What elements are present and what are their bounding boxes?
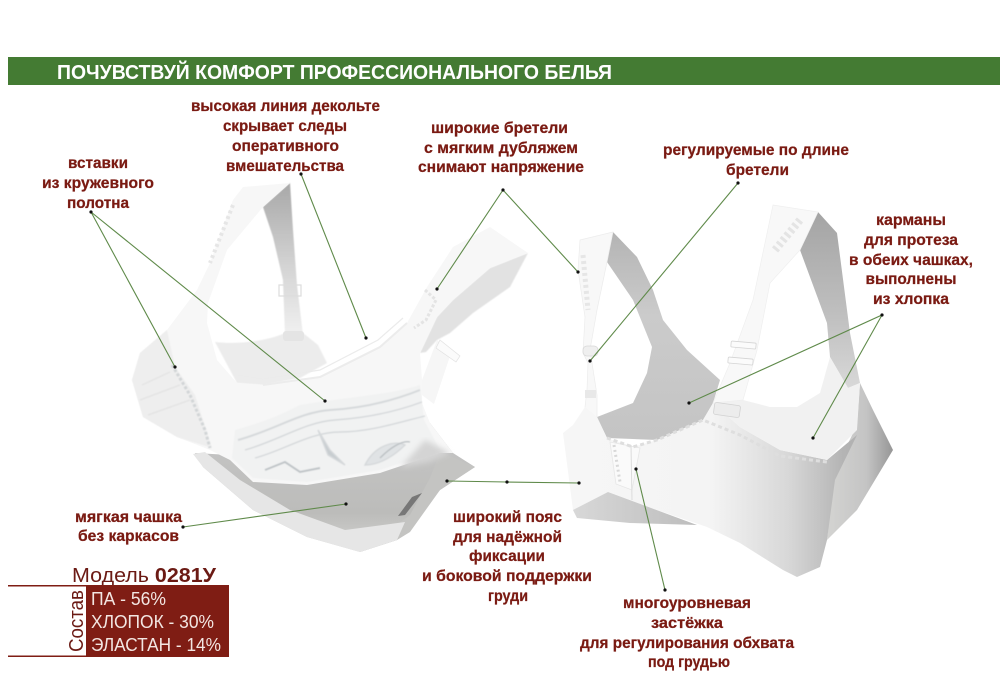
label: high neckline: оперативного (232, 138, 339, 155)
label: wide band: широкий пояс (453, 509, 562, 526)
composition heading: Состав (66, 590, 88, 652)
model and composition block (8, 565, 229, 657)
label: high neckline (191, 98, 380, 175)
label: multi-level closure: многоуровневая (623, 595, 751, 612)
label: wide band: фиксации (469, 548, 545, 565)
grey inner cup and band (195, 423, 475, 552)
lace panel (232, 385, 440, 482)
right strap lining (800, 212, 860, 388)
label: multi-level closure: застёжка (651, 615, 723, 632)
label: soft cup: мягкая чашка (75, 509, 182, 526)
illustration: bra back view (563, 205, 893, 577)
left strap lining (597, 232, 720, 440)
label: wide straps (418, 120, 584, 176)
leader lines (89, 172, 884, 592)
side lace (132, 330, 212, 448)
illustration: bra front view (132, 183, 528, 552)
banner title: ПОЧУВСТВУЙ КОМФОРТ ПРОФЕССИОНАЛЬНОГО БЕЛЬЯ (57, 60, 612, 84)
strap underside and slider (420, 253, 528, 404)
label: wide band: и боковой поддержки (422, 568, 592, 585)
label: prosthesis pockets: карманы (876, 212, 946, 229)
label: soft cup: без каркасов (78, 528, 179, 545)
label: high neckline: вмешательства (226, 158, 344, 175)
label: prosthesis pockets: для протеза (864, 232, 958, 249)
right strap (713, 205, 818, 418)
label: adjustable straps (663, 142, 849, 179)
label: wide straps: широкие бретели (431, 120, 568, 137)
back strap and inner back (215, 183, 327, 385)
composition list: ХЛОПОК - 30% (91, 612, 214, 632)
belt underside (573, 492, 697, 525)
label: lace inserts: из кружевного (42, 175, 154, 192)
label: wide band (422, 509, 592, 605)
label: adjustable straps: регулируемые по длине (663, 142, 849, 159)
label: wide band: для надёжной (453, 529, 562, 546)
label: lace inserts (42, 155, 154, 212)
label: prosthesis pockets: выполнены (866, 271, 956, 288)
label: soft cup (75, 509, 182, 545)
label: wide straps: с мягким дубляжем (424, 140, 578, 157)
left strap (578, 232, 613, 420)
composition list: ЭЛАСТАН - 14% (91, 635, 221, 655)
label: multi-level closure: под грудью (648, 654, 730, 671)
main white cup and strap (132, 183, 528, 485)
label: high neckline: высокая линия декольте (191, 98, 380, 115)
label: lace inserts: вставки (68, 155, 128, 172)
front cup (713, 357, 860, 460)
side cup (827, 383, 893, 540)
belt (563, 403, 857, 577)
label: adjustable straps: бретели (726, 162, 789, 179)
header banner (8, 57, 1000, 85)
label: prosthesis pockets: в обеих чашках, (849, 252, 973, 269)
composition panel (86, 585, 229, 657)
label: high neckline: скрывает следы (223, 118, 347, 135)
soft shading on armhole (400, 440, 450, 468)
model number: Модель 0281У (72, 565, 217, 587)
label: prosthesis pockets: из хлопка (873, 291, 949, 308)
label: wide band: груди (488, 588, 528, 605)
label: multi-level closure (580, 595, 794, 671)
hook and eye closure (610, 442, 640, 500)
label: lace inserts: полотна (67, 195, 129, 212)
label: multi-level closure: для регулирования обхвата (580, 635, 794, 652)
composition list (91, 589, 221, 655)
label: prosthesis pockets (849, 212, 973, 308)
scalloped edges (607, 420, 827, 462)
label: wide straps: снимают напряжение (418, 159, 584, 176)
composition list: ПА - 56% (91, 589, 166, 609)
